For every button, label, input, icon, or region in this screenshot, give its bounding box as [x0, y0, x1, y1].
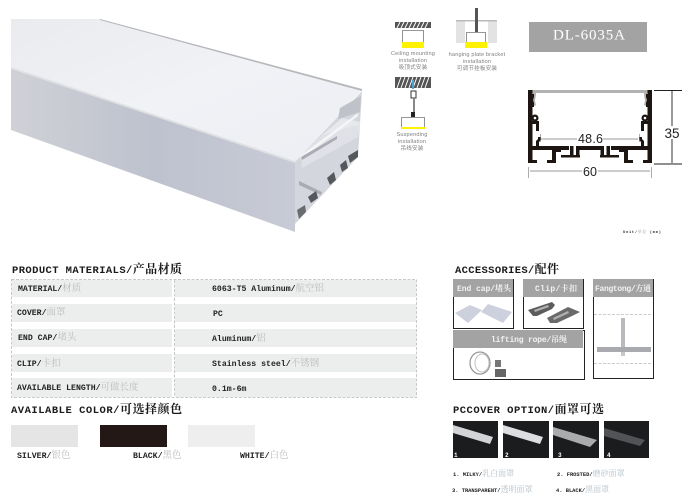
model number badge — [529, 22, 647, 52]
icon: ceiling mounting installation — [391, 22, 435, 71]
row: clip: Stainless steel/不锈钢 — [212, 357, 320, 369]
accessory: lifting rope: lifting rope/吊绳 — [491, 334, 567, 345]
row: clip: CLIP/卡扣 — [17, 357, 61, 369]
dimension 35: 35 — [664, 126, 680, 141]
cover labels: 1. MILKY/乳白面罩 — [453, 468, 514, 479]
colour swatch: white — [188, 425, 289, 461]
unit note: Unit/单位 (mm) — [623, 229, 661, 235]
row: cover — [12, 304, 416, 322]
cover option 4: black: 4 — [607, 452, 611, 459]
accessory: clip — [523, 279, 584, 328]
dimension 35 — [654, 90, 682, 164]
cover labels — [452, 468, 625, 495]
dimension 60: 60 — [583, 165, 597, 179]
accessory: end cap — [453, 279, 514, 328]
profile cross-section — [528, 90, 652, 163]
icon: ceiling mounting installation: installation — [399, 58, 427, 64]
icon: suspending installation: Suspending — [396, 132, 428, 138]
row: material: 6063-T5 Aluminum/航空铝 — [212, 282, 325, 294]
cover option 3: transparent: 3 — [558, 452, 562, 459]
materials table — [12, 280, 416, 398]
row: end cap: END CAP/堵头 — [18, 331, 77, 343]
icon: hanging plate bracket installation: installation — [463, 59, 491, 65]
dimension 60 — [528, 165, 652, 179]
icon: hanging plate bracket installation: 可调节挂板安装 — [457, 64, 497, 72]
cover option 4: black — [604, 421, 649, 459]
dimension 48.6 — [540, 132, 640, 146]
row: material: MATERIAL/材质 — [18, 282, 82, 294]
row: material — [12, 280, 416, 297]
colour swatch: silver — [11, 425, 78, 461]
icon: ceiling mounting installation: 吸顶式安装 — [399, 63, 428, 71]
cover labels: 3. TRANSPARENT/透明面罩 — [452, 484, 533, 495]
icon: hanging plate bracket installation — [449, 8, 506, 72]
accessory: clip: Clip/卡扣 — [535, 283, 577, 294]
heading: product materials: PRODUCT MATERIALS/产品材质 — [12, 261, 182, 277]
row: end cap — [12, 329, 416, 347]
accessory: fangtong — [593, 279, 654, 378]
icon: ceiling mounting installation: Ceiling mounting — [391, 51, 435, 57]
icon: suspending installation — [395, 77, 431, 152]
accessory: lifting rope — [453, 330, 584, 380]
colour swatch: black: BLACK/黑色 — [133, 449, 182, 461]
colour swatch: white: WHITE/白色 — [240, 449, 289, 461]
cover labels: 4. BLACK/黑面罩 — [556, 484, 609, 495]
cover option 3: transparent — [553, 421, 599, 459]
row: cover: PC — [213, 310, 223, 319]
row: available length: AVAILABLE LENGTH/可做长度 — [17, 381, 139, 393]
row: available length: 0.1m-6m — [212, 385, 246, 394]
icon: suspending installation: installation — [398, 139, 426, 145]
cover labels: 2. FROSTED/磨砂面罩 — [557, 468, 625, 479]
accessory: fangtong: Fangtong/方通 — [595, 283, 651, 294]
cover option 2: frosted — [503, 421, 549, 459]
row: clip — [12, 354, 416, 372]
heading: accessories: ACCESSORIES/配件 — [455, 261, 559, 277]
cover option 1: milky — [453, 421, 498, 459]
accessory: end cap: End cap/堵头 — [457, 283, 512, 294]
row: cover: COVER/面罩 — [17, 307, 66, 318]
icon: hanging plate bracket installation: hanging plate bracket — [449, 52, 506, 58]
heading: PC cover option: PCCOVER OPTION/面罩可选 — [453, 401, 604, 417]
cover option 2: frosted: 2 — [505, 452, 509, 459]
product photo: aluminium profile — [11, 19, 362, 232]
colour swatch: silver: SILVER/银色 — [17, 449, 71, 461]
cover option 1: milky: 1 — [454, 452, 458, 459]
dimension 48.6: 48.6 — [578, 132, 603, 146]
row: available length — [12, 378, 416, 397]
colour swatch: black — [100, 425, 182, 461]
cross-section dimension drawing — [528, 90, 682, 179]
row: end cap: Aluminum/铝 — [212, 332, 266, 344]
heading: available color: AVAILABLE COLOR/可选择颜色 — [11, 401, 182, 417]
icon: suspending installation: 吊线安装 — [401, 144, 424, 152]
model number badge: DL-6035A — [553, 28, 625, 44]
